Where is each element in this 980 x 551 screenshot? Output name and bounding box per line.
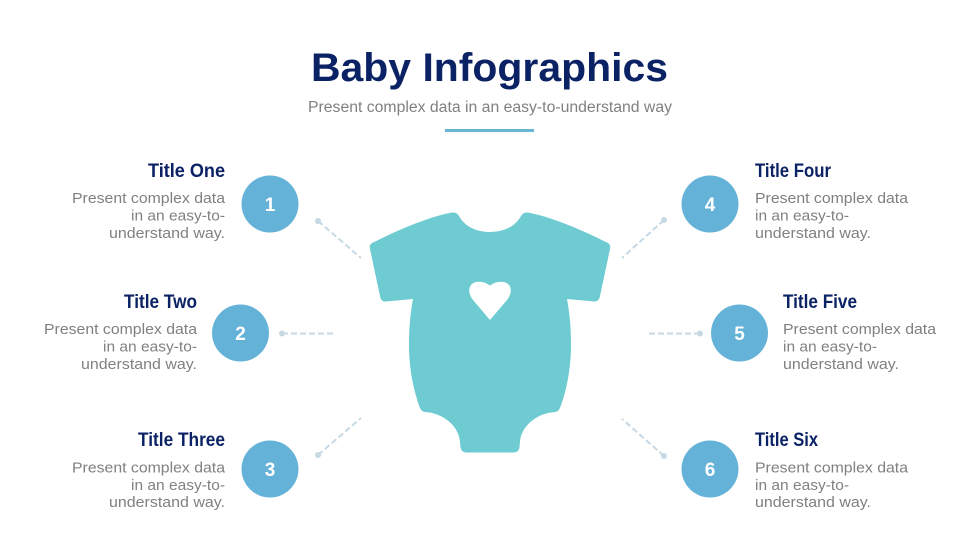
text block: title one [72,161,226,242]
text block: title five: understand way. [783,356,899,373]
text block: title five: Title Five [783,292,857,313]
text block: title five [783,292,937,373]
text block: title one: understand way. [109,225,225,242]
text block: title five: in an easy-to- [783,338,877,356]
text block: title three: Present complex data [72,460,226,476]
badge 2 [212,304,269,362]
text block: title four: Present complex data [755,190,909,207]
text block: title one: Title One [148,161,225,182]
text block: title six: Title Six [755,430,818,451]
text block: title three: Title Three [138,430,225,451]
subtitle: Present complex data in an easy-to-understand way [308,99,672,116]
badge 6: 6 [705,460,715,481]
text block: title three: in an easy-to- [131,477,225,494]
badge 1: 1 [265,195,276,216]
text block: title two: Title Two [124,292,197,313]
title underline [445,129,534,132]
text block: title six: understand way. [755,494,871,511]
text block: title two: in an easy-to- [103,338,197,356]
text block: title one: Present complex data [72,190,226,207]
text block: title four: in an easy-to- [755,208,849,224]
text block: title five: Present complex data [783,321,937,338]
connector 5 [646,330,703,336]
icon: heart [469,282,511,320]
connector 6 [622,419,667,459]
connector 4 [622,217,667,258]
text block: title six [755,430,909,511]
text block: title four [755,161,909,242]
badge 4 [682,176,738,232]
icon: baby onesie with heart [370,212,610,452]
text block: title six: Present complex data [755,460,909,476]
text block: title two: understand way. [81,356,197,373]
badge 4: 4 [705,195,716,216]
connector 1 [315,218,361,258]
badge 2: 2 [235,324,246,345]
badge 3: 3 [265,460,275,481]
text block: title three [72,430,226,511]
text block: title two: Present complex data [44,321,198,338]
text block: title three: understand way. [109,494,225,511]
badge 5 [711,304,768,362]
badge 1 [242,176,298,232]
text block: title one: in an easy-to- [131,208,225,224]
badge 3 [242,440,298,498]
text block: title four: Title Four [755,161,832,182]
badge 6 [682,440,738,498]
connector 2 [279,330,336,336]
badge 5: 5 [734,324,745,345]
title: Baby Infographics [311,46,668,90]
text block: title two [44,292,198,373]
text block: title four: understand way. [755,225,871,242]
text block: title six: in an easy-to- [755,477,849,494]
connector 3 [315,418,361,458]
